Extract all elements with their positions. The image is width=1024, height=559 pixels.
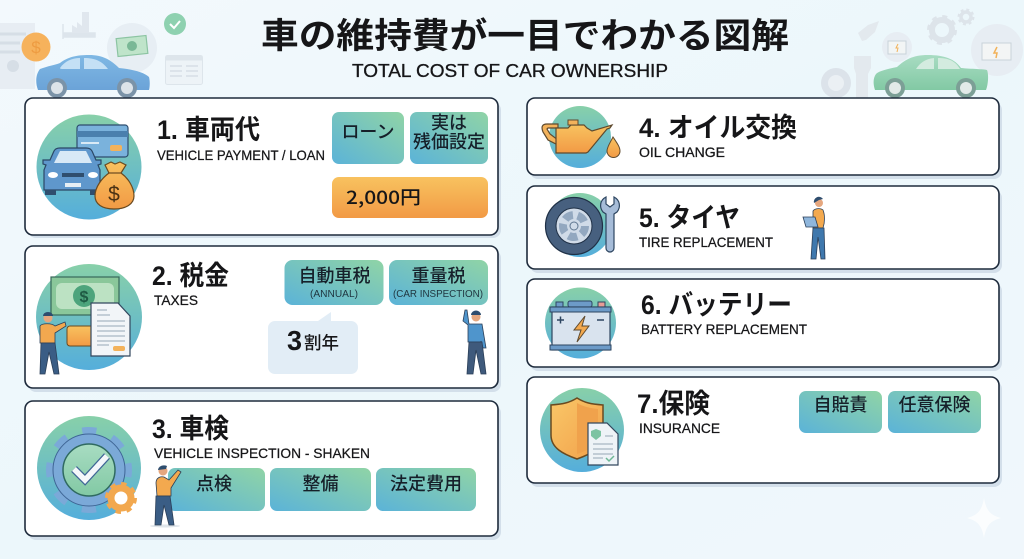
panel: 5 tire replacement	[527, 186, 1002, 273]
chip: statutory fees	[376, 468, 476, 511]
heading: 1. 車両代	[157, 115, 260, 145]
callout: 3 割年: 3	[287, 325, 302, 356]
chip: weight tax: 重量税	[412, 262, 466, 288]
subtitle: TOTAL COST OF CAR OWNERSHIP	[352, 61, 668, 81]
heading: 6. バッテリー	[641, 290, 792, 320]
header decoration right	[821, 10, 1023, 98]
subheading: OIL CHANGE	[639, 144, 725, 160]
chip: automobile tax	[284, 260, 384, 305]
chip: maintenance	[270, 468, 371, 511]
panel: 3 vehicle inspection	[25, 401, 501, 540]
chip: loan	[332, 112, 404, 164]
chip: automobile tax: (ANNUAL)	[310, 288, 358, 300]
chip: statutory fees: 法定費用	[390, 470, 462, 496]
callout: 3 割年	[268, 312, 358, 374]
chip: maintenance: 整備	[302, 470, 338, 496]
chip: residual value	[410, 109, 488, 164]
header decoration left: $	[31, 38, 41, 57]
panel: 7 insurance	[527, 377, 1002, 487]
subheading: VEHICLE PAYMENT / LOAN	[157, 147, 325, 163]
chip: check	[168, 468, 265, 511]
chip: 2000 yen	[332, 177, 488, 218]
icon: battery	[545, 288, 616, 358]
chip: 2000 yen: 2,000円	[346, 184, 421, 210]
callout: 3 割年: 割年	[304, 330, 339, 355]
icon: banknote and document	[36, 264, 142, 370]
subheading: BATTERY REPLACEMENT	[641, 321, 807, 337]
heading: 4. オイル交換	[639, 113, 797, 143]
chip: automobile tax: 自動車税	[298, 262, 370, 288]
icon: car, card and money bag	[36, 114, 142, 220]
chip: compulsory insurance	[799, 391, 882, 433]
icon: shield and document	[540, 388, 624, 472]
subheading: VEHICLE INSPECTION - SHAKEN	[154, 445, 370, 461]
icon: car, card and money bag: $	[108, 183, 120, 206]
chip: residual value: 残価設定	[413, 128, 485, 154]
chip: check: 点検	[196, 470, 232, 496]
heading: 2. 税金	[152, 261, 229, 291]
header decoration left	[0, 12, 202, 89]
chip: weight tax: (CAR INSPECTION)	[393, 288, 483, 300]
title: 車の維持費が一目でわかる図解	[261, 8, 789, 59]
figure: person with clipboard	[40, 312, 66, 374]
figure: person with laptop	[803, 197, 825, 259]
icon: oil can	[542, 106, 620, 168]
chip: voluntary insurance: 任意保険	[898, 391, 970, 417]
heading: 5. タイヤ	[639, 203, 740, 233]
heading: 7.保険	[637, 389, 710, 419]
figure: person pointing up	[463, 310, 486, 374]
chip: residual value: 実は	[431, 109, 467, 135]
panel: 1 vehicle payment	[25, 98, 501, 238]
subheading: TAXES	[154, 292, 198, 308]
icon: gear with check	[37, 416, 141, 520]
icon: tire and wrench	[546, 193, 619, 257]
subheading: TIRE REPLACEMENT	[639, 234, 773, 250]
heading: 3. 車検	[152, 414, 229, 444]
figure: person pointing at chips	[150, 465, 181, 528]
icon: sparkle	[967, 498, 1001, 538]
panel: 4 oil change	[527, 98, 1002, 179]
icon: banknote and document: $	[80, 289, 89, 306]
panel: 6 battery replacement	[527, 279, 1002, 371]
chip: weight tax	[389, 260, 488, 305]
chip: compulsory insurance: 自賠責	[814, 391, 868, 417]
icon: blue car	[36, 55, 150, 98]
chip: voluntary insurance	[888, 391, 981, 433]
panel: 2 taxes	[25, 246, 501, 392]
chip: loan: ローン	[341, 118, 395, 144]
icon: green car	[874, 55, 988, 98]
subheading: INSURANCE	[639, 420, 720, 436]
